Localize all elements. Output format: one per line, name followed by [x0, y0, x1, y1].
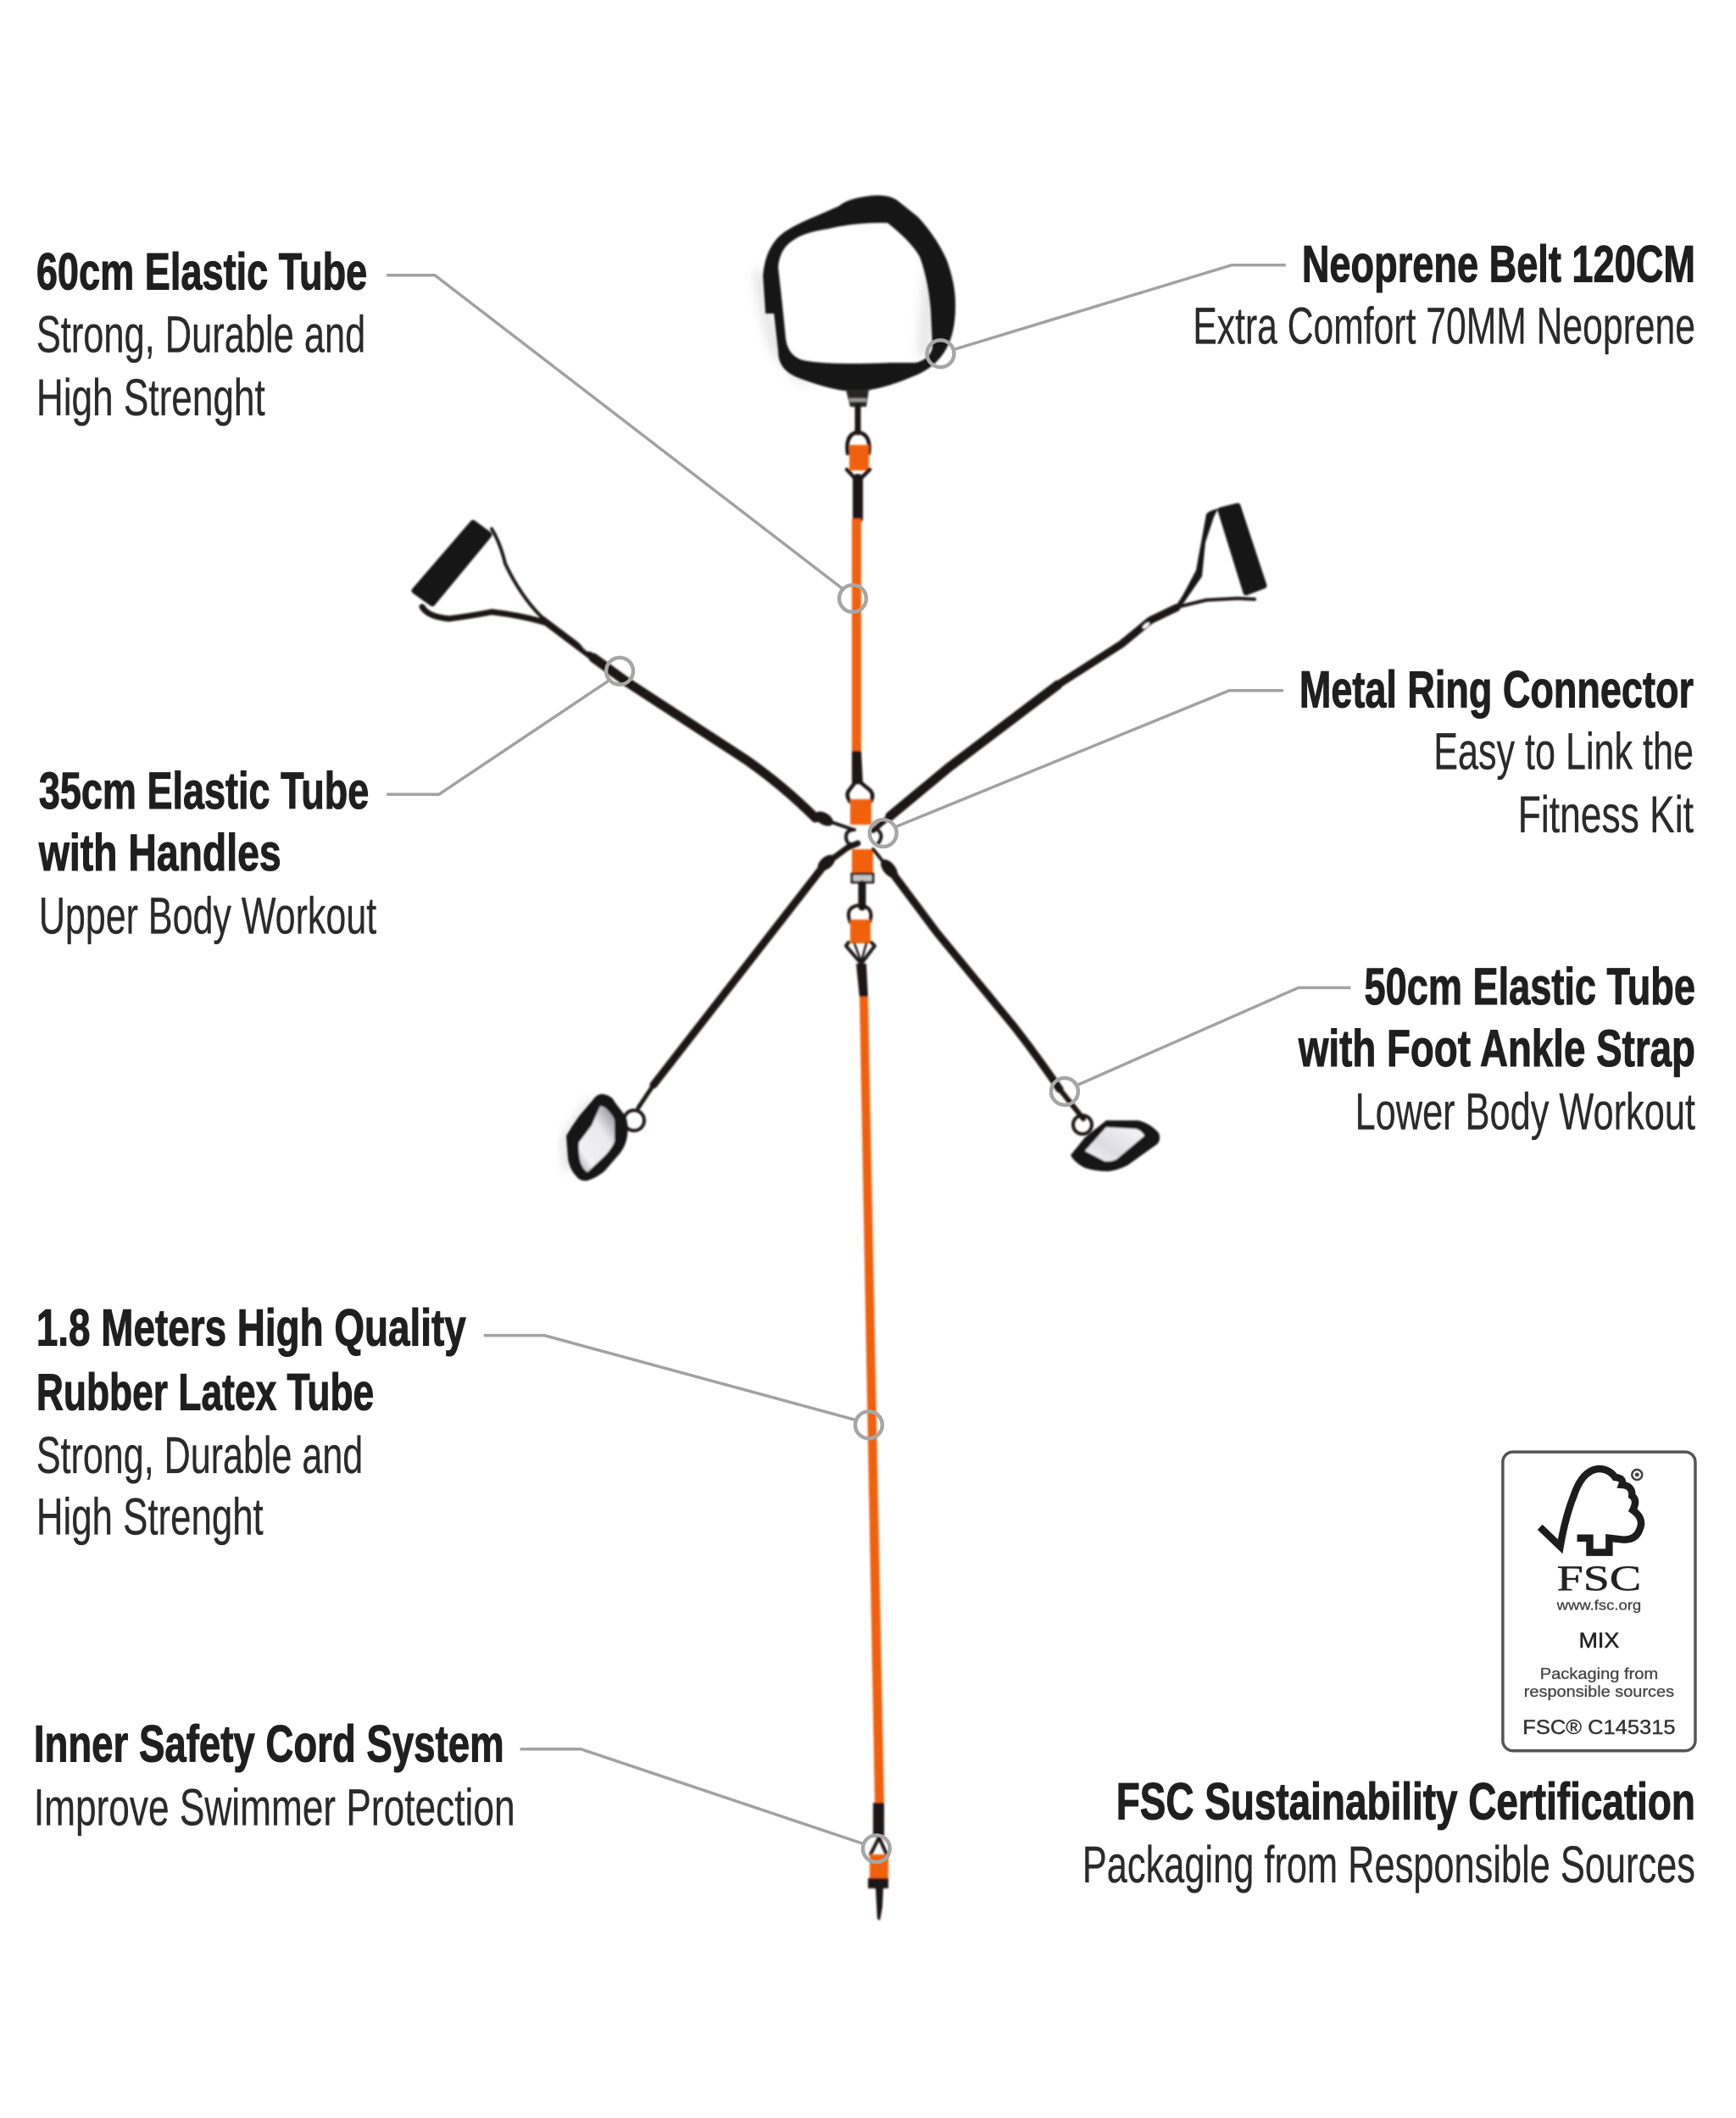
heading: 1.8 Meters High Quality [36, 1299, 466, 1357]
heading: with Handles [38, 824, 281, 881]
left hub clip [812, 809, 854, 830]
heading: 60cm Elastic Tube [36, 243, 367, 301]
1.8m orange latex tube [860, 997, 884, 1803]
leader line [520, 1749, 890, 1862]
right handle arm [873, 506, 1264, 843]
central connector hub [846, 751, 875, 998]
leader line [870, 691, 1283, 847]
callout: 35cm elastic tube with handles [38, 658, 633, 945]
description [36, 1426, 363, 1546]
callout: neoprene belt [927, 236, 1695, 367]
description: Strong, Durable and [36, 1426, 363, 1484]
callout: metal ring connector [870, 661, 1694, 847]
neoprene belt [759, 196, 955, 407]
right ankle strap arm [873, 849, 1160, 1171]
callout: 50cm elastic tube with foot ankle strap [1051, 958, 1695, 1141]
heading: 35cm Elastic Tube [39, 762, 369, 820]
description: High Strenght [36, 369, 265, 426]
top connector [847, 407, 870, 519]
packaging text: Packaging from [1540, 1665, 1658, 1683]
license code: FSC® C145315 [1522, 1716, 1676, 1739]
description: Upper Body Workout [39, 887, 376, 945]
description: Strong, Durable and [36, 305, 365, 363]
MIX label: MIX [1579, 1629, 1620, 1653]
callout: 1.8 meters latex tube [36, 1299, 882, 1546]
leader line [387, 275, 866, 612]
heading [1298, 958, 1695, 1077]
description: High Strenght [36, 1488, 264, 1546]
leader line [387, 658, 633, 794]
FSC wordmark: FSC [1557, 1559, 1641, 1598]
heading [38, 762, 369, 881]
product: swim bungee kit [415, 196, 1264, 1921]
description [1433, 722, 1694, 843]
left ankle strap arm [566, 843, 858, 1181]
bottom clip [868, 1803, 888, 1921]
heading [36, 1299, 466, 1420]
leader line [927, 265, 1286, 367]
callout: 60cm elastic tube [36, 243, 866, 612]
description [36, 305, 365, 426]
website: www.fsc.org [1555, 1598, 1641, 1613]
icon: FSC tree logo [1540, 1469, 1642, 1553]
callout: inner safety cord [34, 1715, 890, 1862]
callout: FSC sustainability certification [1082, 1772, 1695, 1893]
left handle arm [415, 523, 854, 830]
leader line [484, 1336, 882, 1438]
FSC certification badge [1503, 1452, 1695, 1751]
left ankle cuff [566, 1094, 628, 1181]
heading: Rubber Latex Tube [36, 1363, 374, 1420]
packaging text: responsible sources [1524, 1683, 1674, 1701]
60cm orange elastic tube [852, 519, 861, 751]
belt buckle [846, 390, 869, 407]
packaging text [1524, 1665, 1674, 1701]
right ankle cuff [1071, 1120, 1160, 1171]
heading: Inner Safety Cord System [34, 1715, 504, 1773]
description: Improve Swimmer Protection [34, 1778, 515, 1836]
leader line [1051, 987, 1351, 1105]
